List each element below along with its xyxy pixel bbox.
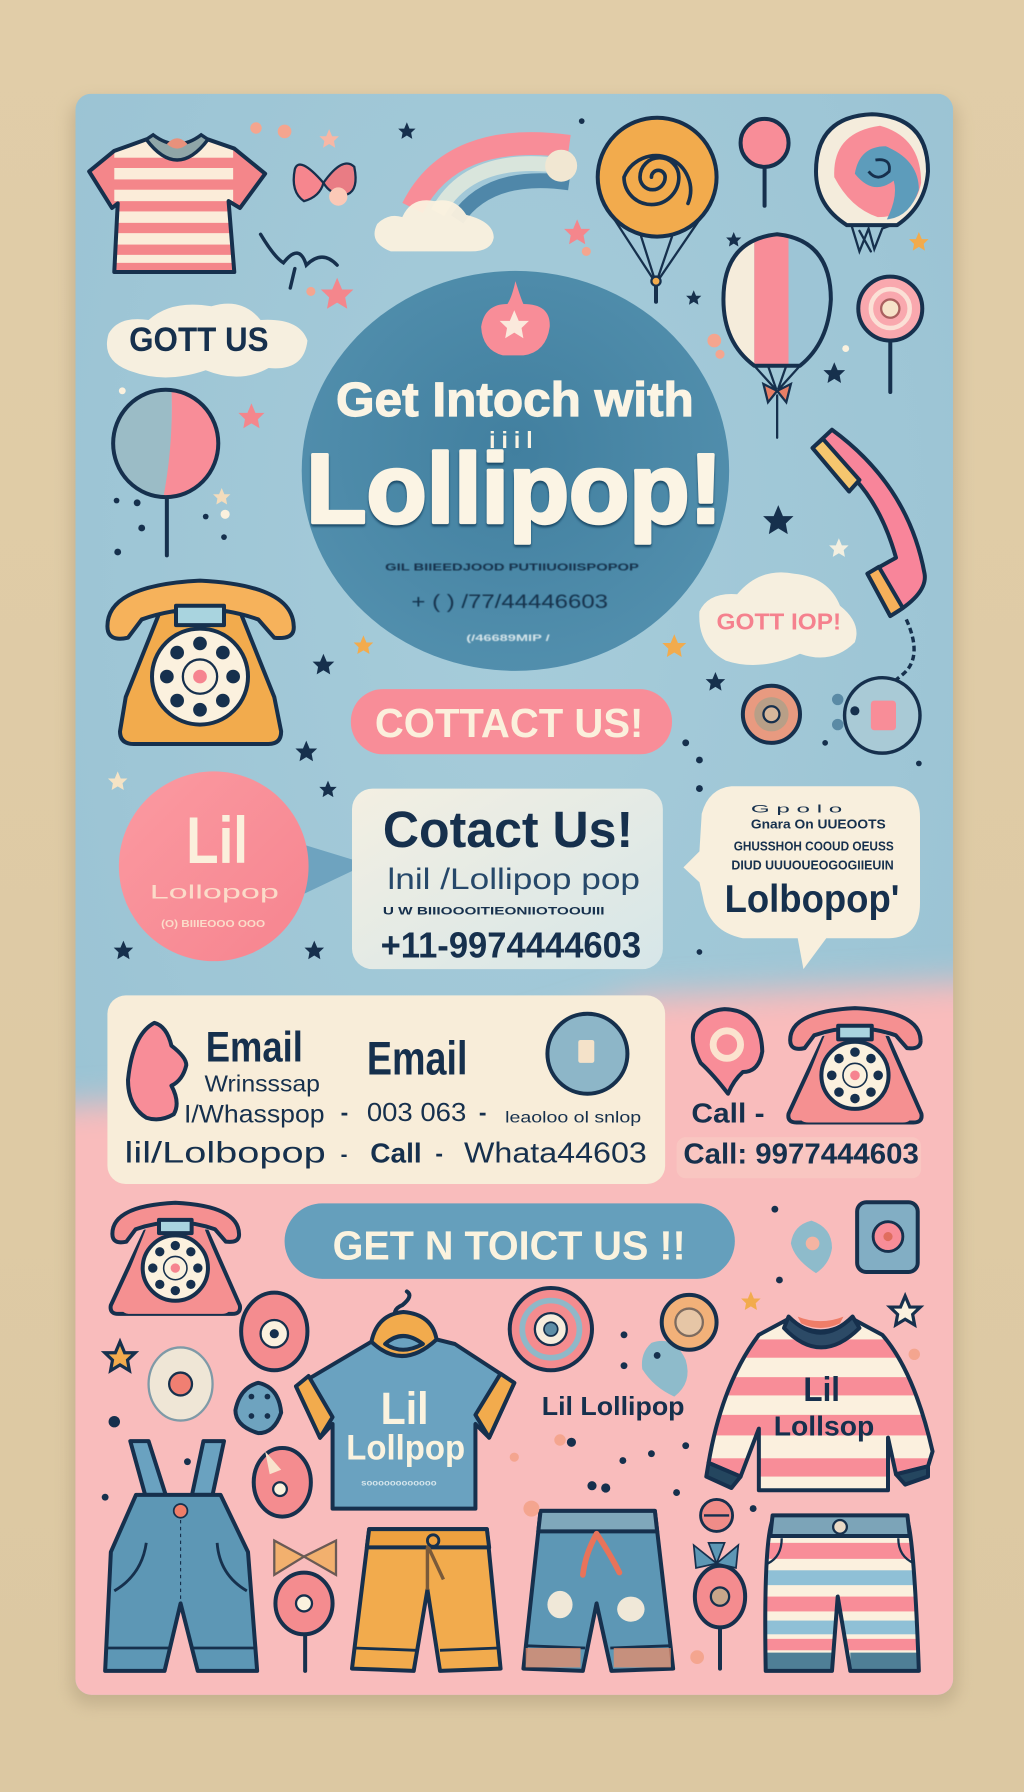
text: call block: Call: 9977444603 xyxy=(683,1138,919,1170)
icon: candy circle two xyxy=(149,1347,213,1421)
text: whatsapp rows: leaoloo ol snlop xyxy=(505,1109,641,1126)
text: whatsapp rows: I/Whasspop xyxy=(184,1100,325,1128)
text: whatsapp rows xyxy=(125,1070,647,1169)
icon: orange shorts xyxy=(352,1529,501,1671)
text: whatsapp rows: - xyxy=(479,1099,486,1125)
icon: pink phone row four xyxy=(111,1203,240,1314)
decorative confetti stars xyxy=(105,122,929,1371)
button: get in touch: GET N TOICT US !! xyxy=(333,1222,686,1268)
icon: pink blob xyxy=(128,1023,186,1119)
callout: pink lil circle: Lil xyxy=(186,804,248,878)
heading: contact us: Cotact Us! xyxy=(383,800,633,858)
icon: tan swirl circle with blue bubble xyxy=(642,1295,717,1397)
cloud: pink text xyxy=(699,572,857,665)
button: contact us: COTTACT US! xyxy=(375,700,643,746)
icon: denim shorts xyxy=(523,1511,673,1671)
icon: striped pants xyxy=(760,1515,931,1671)
cloud: got us xyxy=(107,304,307,377)
text: whatsapp rows: - xyxy=(435,1140,443,1166)
text: call block: Call - xyxy=(691,1097,765,1128)
icon: blue blob xyxy=(235,1383,281,1433)
icon: striped sweater xyxy=(697,1317,949,1490)
icon: half and half lollipop xyxy=(109,389,229,555)
callout: speech bubble: DIUD UUUOUEOGOGIIEUIN xyxy=(731,859,894,873)
icon: donut candy xyxy=(254,1448,311,1517)
title line: Get Intoch with xyxy=(336,374,694,427)
text: phone number: +11-9974444603 xyxy=(381,925,641,966)
title brand word: Lollipop! xyxy=(306,433,722,543)
icon: blue lil lollipop t-shirt xyxy=(296,1291,514,1509)
text: handle: lnil /Lollipop pop xyxy=(387,863,640,896)
decorative confetti dots xyxy=(102,118,922,1664)
icon: pink and blue balloon xyxy=(720,229,840,438)
callout: speech bubble: Lolbopop' xyxy=(725,878,899,921)
icon: striped t-shirt xyxy=(80,135,274,274)
circle small text xyxy=(385,562,639,643)
text: email two: Email xyxy=(367,1032,467,1084)
icon: blue lil lollipop t-shirt: Lollpop xyxy=(346,1427,465,1467)
icon: small blue bubble xyxy=(791,1221,832,1273)
icon: small pink lollipop xyxy=(741,119,789,206)
callout: pink lil circle: (O) BIIIEOOO OOO xyxy=(161,919,265,930)
text: whatsapp rows: 003 063 xyxy=(367,1097,466,1127)
circle small text: GIL BIIEEDJOOD PUTIIUOIISPOPOP xyxy=(385,562,639,573)
icon: rainbow with cloud xyxy=(375,144,577,251)
icon: pink phone receiver xyxy=(813,430,925,699)
icon: lollipop with blue leaves xyxy=(694,1543,745,1669)
icon: striped sweater: Lollsop xyxy=(774,1410,874,1441)
icon: pink phone top right xyxy=(788,1008,922,1123)
button: get in touch xyxy=(285,1203,735,1279)
icon: lollipop with bow xyxy=(274,1541,336,1671)
text: whatsapp rows: Call xyxy=(370,1137,422,1168)
circle small text: + ( ) /77/44446603 xyxy=(411,591,608,613)
icon: square device xyxy=(857,1202,918,1272)
circle small text: (/46689MIP / xyxy=(466,633,550,643)
text: email one: Email xyxy=(206,1024,303,1071)
text: whatsapp rows: - xyxy=(341,1143,348,1166)
icon: small candy xyxy=(701,1499,733,1531)
button: contact us xyxy=(351,689,672,754)
icon: blue circle xyxy=(547,1014,627,1094)
text: call block xyxy=(677,1097,921,1178)
icon: pink lollipop right xyxy=(858,277,922,392)
icon: orange spiral lollipop balloon xyxy=(598,118,717,302)
icon: star apple xyxy=(481,281,550,355)
panel: central circle heading xyxy=(302,271,729,671)
icon: blue lil lollipop t-shirt: soooooooooooo xyxy=(361,1479,437,1488)
icon: small round lollipop xyxy=(743,686,800,743)
callout: speech bubble: G p o l o xyxy=(751,804,842,816)
text: whatsapp rows: lil/Lolbopop xyxy=(125,1136,326,1169)
icon: swirl circle xyxy=(510,1288,592,1370)
panel: contact card xyxy=(352,789,663,969)
text: lil lollipop label: Lil Lollipop xyxy=(542,1391,685,1421)
icon: swirl balloon xyxy=(816,114,928,251)
icon: striped sweater: Lil xyxy=(803,1371,840,1409)
text: whatsapp rows: Whata44603 xyxy=(464,1137,647,1169)
icon: denim overalls xyxy=(105,1441,257,1671)
panel: email card xyxy=(107,995,665,1184)
icon: candy circle one xyxy=(241,1293,307,1370)
callout: pink lil circle: Lollopop xyxy=(150,881,279,903)
text: small line: U W BIIIOOOITIEONIIOTOOUIII xyxy=(383,905,605,917)
panel: card background xyxy=(76,94,954,1695)
icon: bow xyxy=(294,163,356,206)
callout: pink lil circle xyxy=(119,771,367,961)
title small word: iiil xyxy=(489,427,533,453)
icon: pink chat bubble xyxy=(693,1009,762,1094)
text: whatsapp rows: - xyxy=(341,1099,348,1125)
icon: orange rotary phone xyxy=(107,581,294,744)
text: whatsapp rows: Wrinsssap xyxy=(205,1070,320,1096)
decorative squiggle xyxy=(261,234,337,288)
cloud: got us: GOTT US xyxy=(129,321,269,359)
callout: speech bubble: GHUSSHOH COOUD OEUSS xyxy=(734,839,894,853)
callout: speech bubble xyxy=(683,786,920,969)
icon: bubble circle with pink tag xyxy=(832,678,920,753)
callout: speech bubble: Gnara On UUEOOTS xyxy=(751,818,886,832)
icon: blue lil lollipop t-shirt: Lil xyxy=(381,1383,429,1434)
cloud: pink text: GOTT IOP! xyxy=(717,609,841,635)
